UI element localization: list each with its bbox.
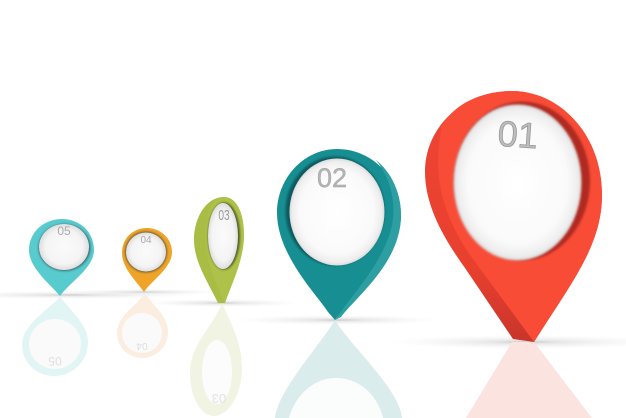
pin 04 (orange): 04 [140, 235, 152, 246]
reflection: pin 05: 05 [48, 354, 62, 368]
pin 03 (green) [194, 197, 244, 303]
pin 01 (red) [425, 91, 602, 342]
label 01: 01 [496, 113, 539, 156]
label 02: 02 [317, 163, 347, 193]
recess [454, 102, 590, 260]
floor shadows [0, 289, 626, 349]
pin 03 (green): 03 [218, 206, 230, 224]
pin 05 (teal-light): 05 [57, 224, 71, 238]
pin 04 (orange) [122, 228, 172, 292]
pin 05 (teal-light) [29, 219, 94, 296]
reflection: pin 04: 04 [136, 340, 148, 351]
reflection: pin 02 [275, 320, 402, 418]
pin 02 (teal) [277, 149, 401, 320]
reflection: pin 01 [466, 342, 592, 418]
reflection: pin 05 [22, 297, 88, 376]
reflection: pin 03: 03 [212, 391, 226, 406]
reflection: pin 03 [190, 303, 242, 416]
reflection: pin 04 [117, 293, 168, 358]
